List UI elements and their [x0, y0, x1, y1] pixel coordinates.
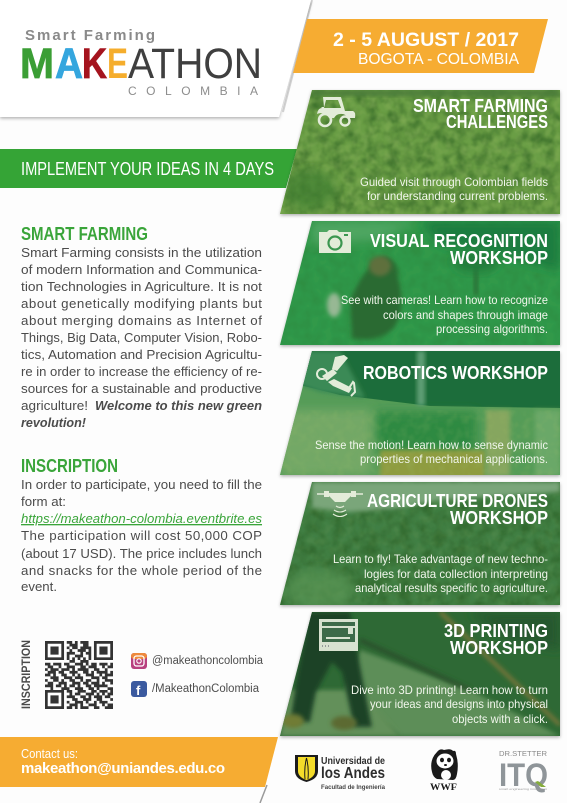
panel: robotics workshop — [280, 351, 560, 480]
banner: date and place: 2 - 5 AUGUST / 2017 — [333, 30, 519, 51]
logo: Universidad de los Andes: Universidad de — [321, 756, 385, 767]
icon: 3D printer — [319, 619, 358, 651]
description: learn to fly: analytical results specific to agriculture. — [355, 582, 548, 595]
paragraph: smart farming description: revolution! — [21, 415, 87, 430]
logo: Universidad de los Andes — [295, 755, 385, 791]
heading: visual recognition workshop: VISUAL RECOGNITION — [370, 231, 548, 251]
paragraph: smart farming description: sources for a sustainable and productive — [21, 381, 262, 396]
description: learn to fly: logies for data collection interpreting — [364, 568, 548, 581]
heading: 3D printing workshop: WORKSHOP — [450, 638, 548, 658]
paragraph: how to participate: In order to participate, you need to fill the — [21, 477, 262, 492]
description: sense the motion: Sense the motion! Learn how to sense dynamic — [315, 439, 548, 452]
description: learn to fly: Learn to fly! Take advantage of new techno- — [333, 553, 548, 566]
banner: implement your ideas: IMPLEMENT YOUR IDEAS IN 4 DAYS — [21, 159, 274, 179]
paragraph: smart farming description: Welcome to this new green — [95, 398, 262, 413]
heading: visual recognition workshop: WORKSHOP — [450, 248, 548, 268]
banner: contact: makeathon@uniandes.edu.co — [21, 760, 225, 777]
panel: visual recognition workshop — [280, 221, 560, 345]
paragraph: how to participate: event. — [21, 579, 57, 594]
vertical label: inscription: INSCRIPTION — [21, 640, 33, 709]
paragraph: how to participate: and snacks for the whole period of the — [21, 563, 262, 578]
heading: smart farming: SMART FARMING — [21, 224, 148, 244]
description: guided visit — [360, 176, 548, 203]
icon: shield — [295, 755, 318, 782]
panel: logo header — [0, 0, 311, 117]
heading: smart farming challenges — [413, 96, 548, 132]
social: instagram: @makeathoncolombia — [152, 655, 264, 667]
logo: Smart Farming Makeathon Colombia: ATHON — [128, 40, 262, 88]
description: see with cameras — [341, 294, 548, 336]
icon: facebook: f — [136, 683, 141, 698]
logo: Smart Farming Makeathon Colombia: E — [107, 40, 128, 88]
description: dive into 3D printing: your ideas and designs into physical — [370, 698, 548, 711]
panel: smart farming challenges — [280, 90, 560, 214]
heading: robotics workshop: ROBOTICS WORKSHOP — [363, 363, 548, 383]
QR code — [45, 641, 113, 709]
panel: 3D printing workshop — [280, 612, 560, 736]
social: instagram — [131, 653, 264, 669]
description: dive into 3D printing: objects with a click. — [452, 713, 548, 726]
paragraph: smart farming description: of modern Information and Communica- — [21, 262, 262, 277]
description: sense the motion: properties of mechanical applications. — [360, 453, 548, 466]
social: facebook — [131, 681, 260, 698]
heading: agriculture drones workshop: WORKSHOP — [450, 508, 548, 528]
banner: contact: Contact us: — [21, 746, 78, 761]
paragraph: smart farming description: Smart Farming consists in the utilization — [21, 245, 262, 260]
description: guided visit: for understanding current problems. — [367, 190, 548, 203]
description: see with cameras: processing algorithms. — [436, 323, 548, 336]
paragraph: smart farming description: about merging domains as Internet of — [21, 313, 262, 328]
heading: 3D printing workshop — [444, 621, 548, 658]
icon: tractor — [317, 97, 355, 126]
icon: drone — [317, 491, 363, 516]
description: guided visit: Guided visit through Colombian fields — [360, 176, 548, 189]
paragraph: how to participate: form at: — [21, 494, 66, 509]
banner: date and place: BOGOTA - COLOMBIA — [358, 51, 519, 68]
panel: agriculture drones workshop — [280, 482, 560, 610]
logo: WWF panda: WWF — [430, 783, 457, 793]
logo: Smart Farming Makeathon Colombia — [20, 27, 262, 98]
text block: inscription — [21, 456, 262, 594]
icon: instagram — [131, 653, 147, 669]
description: learn to fly — [333, 553, 548, 595]
description: see with cameras: colors and shapes through image — [383, 309, 548, 322]
paragraph: how to participate — [21, 477, 262, 594]
logo: Smart Farming Makeathon Colombia: COLOMBIA — [128, 84, 258, 98]
paragraph: smart farming description: tics, Automation and Precision Agricultu- — [21, 347, 262, 362]
paragraph: smart farming description: Things, Big Data, Computer Vision, Robo- — [21, 330, 262, 345]
social: facebook: /MakeathonColombia — [152, 683, 260, 695]
paragraph: smart farming description — [21, 245, 262, 430]
paragraph: smart farming description: about genetically modifying plants but — [21, 296, 262, 311]
description: see with cameras: See with cameras! Learn how to recognize — [341, 294, 548, 307]
logo: Dr. Stetter ITQ: DR.STETTER — [499, 749, 548, 758]
banner: implement your ideas — [0, 149, 297, 188]
logo: Universidad de los Andes: Facultad de Ingeniería — [321, 784, 385, 791]
heading: smart farming challenges: SMART FARMING — [413, 96, 548, 116]
slanted divider shadow — [260, 0, 312, 803]
heading: smart farming challenges: CHALLENGES — [446, 112, 548, 132]
icon: robot arm — [317, 355, 355, 396]
logo: Dr. Stetter ITQ: smart engineering innovation — [499, 787, 547, 791]
icon: camera — [319, 230, 351, 253]
text block: smart farming — [21, 224, 262, 430]
paragraph: how to participate: (about 17 USD). The price includes lunch — [21, 546, 262, 561]
paragraph: smart farming description: re in order to increase the efficiency of re- — [21, 364, 262, 379]
logo: Smart Farming Makeathon Colombia: A — [55, 40, 83, 88]
logo: Dr. Stetter ITQ: ITQ — [499, 757, 548, 793]
heading: visual recognition workshop — [370, 231, 548, 268]
heading: agriculture drones workshop — [367, 491, 548, 528]
banner: date and place — [293, 19, 548, 73]
description: dive into 3D printing — [351, 684, 548, 726]
logo: Smart Farming Makeathon Colombia: Smart Farming — [25, 27, 155, 44]
logo: Smart Farming Makeathon Colombia: K — [82, 40, 107, 88]
heading: 3D printing workshop: 3D PRINTING — [444, 621, 548, 641]
description: sense the motion — [315, 439, 548, 466]
description: dive into 3D printing: Dive into 3D printing! Learn how to turn — [351, 684, 548, 697]
logo: Universidad de los Andes: los Andes — [321, 765, 385, 782]
logo: Smart Farming Makeathon Colombia: M — [20, 40, 54, 88]
paragraph: how to participate: The participation will cost 50,000 COP — [21, 528, 262, 543]
banner: contact — [0, 737, 278, 787]
paragraph: smart farming description: agriculture! — [21, 398, 88, 413]
logo: WWF panda — [430, 749, 458, 793]
paragraph: how to participate: https://makeathon-colombia.eventbrite.es — [21, 511, 262, 526]
heading: inscription: INSCRIPTION — [21, 456, 118, 476]
paragraph: smart farming description: tion Technologies in Agriculture. It is not — [21, 279, 262, 294]
